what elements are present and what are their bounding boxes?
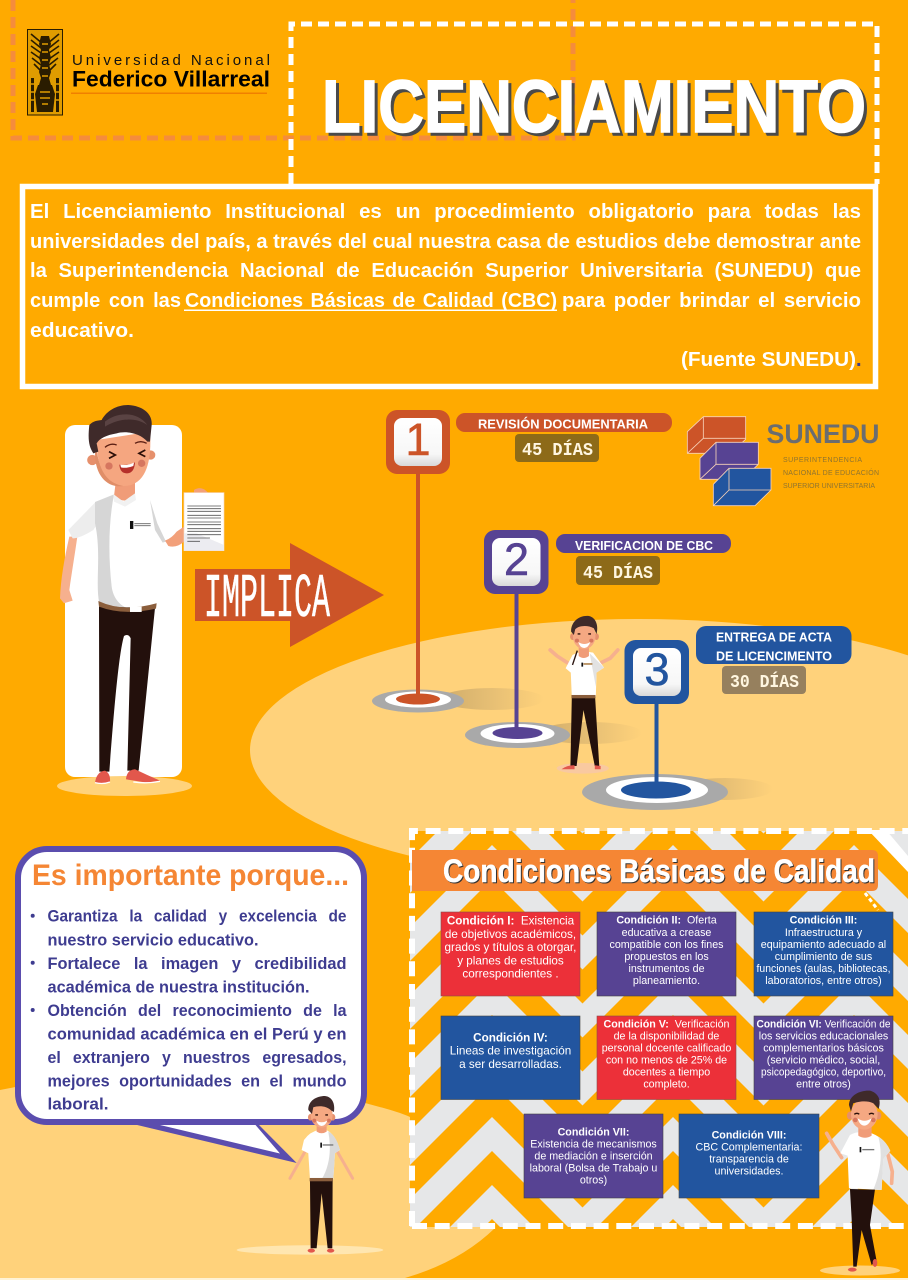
character: student beside bubble (237, 1096, 383, 1255)
condition III: laboratorios, entre otros) (765, 975, 882, 987)
bullet list: laboral. (48, 1096, 108, 1114)
condition VII (524, 1114, 663, 1198)
condition II (597, 912, 736, 996)
condition VI: (servicio médico, social, (767, 1055, 880, 1067)
step 3: duration: 30 DÍAS (730, 671, 799, 693)
condition VI: complementarios básicos (763, 1043, 884, 1055)
condition II: propuestos en los (624, 951, 709, 963)
logo: university crest (28, 30, 62, 115)
logo: SUNEDU: SUNEDU (766, 419, 880, 449)
bullet list: nuestro servicio educativo. (48, 931, 258, 949)
panel: conditions (410, 830, 908, 1227)
step 1: badge: 1 (405, 414, 431, 465)
condition V (597, 1016, 736, 1100)
step 2: label (556, 534, 731, 553)
step 1: duration: 45 DÍAS (522, 439, 593, 461)
step 1: badge (386, 410, 450, 474)
step 1: pole (416, 470, 420, 698)
step 3: pole (654, 700, 658, 788)
bullet list (31, 908, 347, 1114)
condition V: completo. (643, 1079, 690, 1091)
condition II: educativa a crease (622, 927, 711, 939)
condition VI: Condición VI: Verificación de (756, 1019, 891, 1031)
step 3: label: DE LICENCIMENTO (716, 649, 832, 664)
condition VII: Existencia de mecanismos (530, 1139, 657, 1151)
panel: definition: educativo. (30, 320, 134, 342)
step 3: base target (582, 774, 773, 810)
university name: Federico Villarreal (72, 66, 270, 92)
condition II: planeamiento. (633, 975, 700, 987)
condition V: Condición V: Verificación (604, 1019, 730, 1031)
condition I: de objetivos académicos, (445, 928, 576, 941)
condition III: funciones (aulas, bibliotecas, (756, 963, 891, 975)
step 3: duration (722, 666, 806, 694)
condition VII: de mediación e inserción (534, 1151, 653, 1163)
edge highlights (0, 1278, 908, 1280)
bullet list: Fortalece la imagen y credibilidad (48, 955, 346, 973)
panel: importance speech bubble (18, 849, 364, 1163)
bubble heading: Es importante porque... (32, 859, 349, 892)
condition VI: los servicios educacionales (759, 1031, 888, 1043)
condition IV: Condición IV: (473, 1031, 548, 1044)
logo: SUNEDU: NACIONAL DE EDUCACIÓN (783, 468, 879, 477)
bullet list: el extranjero y nuestros egresados, (48, 1049, 346, 1067)
condition VII: otros) (580, 1175, 607, 1187)
step 2: duration: 45 DÍAS (583, 562, 653, 584)
step 3: label: ENTREGA DE ACTA (716, 630, 833, 645)
bullet list: Obtención del reconocimiento de la (48, 1002, 347, 1020)
condition VII: laboral (Bolsa de Trabajo u (530, 1163, 657, 1175)
step 3: badge (624, 640, 689, 704)
floor shadow: right character (820, 1266, 900, 1276)
panel: definition: . (856, 349, 862, 371)
white dashed title frame (291, 24, 877, 184)
step 1: label (456, 413, 672, 432)
step 2: badge (484, 530, 548, 594)
condition V: personal docente calificado (602, 1043, 731, 1055)
university name: Universidad Nacional (72, 52, 270, 69)
condition V: con no menos de 25% de (606, 1055, 727, 1067)
condition VI: psicopedagógico, deportivo, (761, 1067, 886, 1079)
condition VIII: universidades. (715, 1165, 783, 1177)
panel: definition: (Fuente SUNEDU) (681, 349, 856, 371)
condition IV: Lineas de investigación (450, 1045, 571, 1058)
bullet list: mejores oportunidades en el mundo (48, 1073, 346, 1091)
condition III (754, 912, 893, 996)
condition II: compatible con los fines (609, 939, 724, 951)
condition VIII: CBC Complementaria: (696, 1141, 802, 1153)
condition V: de la disponibilidad de (614, 1031, 719, 1043)
condition III: Condición III: (790, 915, 857, 927)
condition VIII: transparencia de (709, 1153, 789, 1165)
character: waving student (827, 1091, 892, 1272)
panel: definition: para poder brindar el servicio (562, 290, 861, 312)
panel: definition: Condiciones Básicas de Calidad (CBC) (185, 290, 557, 312)
character: celebrating student (550, 616, 618, 774)
panel: definition: universidades del país, a través del cual nuestra casa de estudios debe demostrar ante (30, 231, 861, 253)
condition V: docentes a tiempo (623, 1067, 710, 1079)
step 2: pole (514, 590, 518, 732)
panel: definition: El Licenciamiento Institucional es un procedimiento obligatorio para todas las (30, 201, 861, 223)
step 1: label: REVISIÓN DOCUMENTARIA (478, 416, 649, 432)
step 2: base target (465, 722, 642, 748)
step 2: badge: 2 (504, 534, 529, 585)
bullet list: Garantiza la calidad y excelencia de (48, 908, 346, 926)
condition VI (754, 1016, 893, 1100)
condition IV (441, 1016, 580, 1100)
step 2: duration (576, 556, 660, 585)
condition II: Condición II: Oferta (616, 915, 717, 927)
bullet list: académica de nuestra institución. (48, 978, 310, 996)
condition II: instrumentos de (628, 963, 705, 975)
condition I: correspondientes . (462, 967, 559, 980)
background: light ellipse hill (250, 619, 908, 881)
floor shadow: large character (57, 776, 192, 796)
condition VII: Condición VII: (558, 1126, 629, 1138)
condition I: Condición I: Existencia (447, 915, 575, 928)
step 1: base target (372, 688, 544, 712)
background: lower left light hill (0, 1076, 495, 1278)
bubble tail (133, 1124, 297, 1163)
orange dashed frame (13, 0, 573, 138)
condition III: Infraestructura y (785, 927, 863, 939)
panel: definition: cumple con las (30, 290, 181, 312)
condition IV: a ser desarrolladas. (459, 1058, 562, 1071)
icon: stacked blocks (687, 417, 771, 506)
condition III: cumplimiento de sus (775, 951, 872, 963)
arrow: IMPLICA (195, 543, 384, 647)
logo: SUNEDU: SUPERIOR UNIVERSITARIA (783, 483, 875, 490)
character: large student with document (60, 405, 224, 783)
logo: SUNEDU: SUPERINTENDENCIA (783, 457, 862, 464)
panel: definition: la Superintendencia Nacional de Educación Superior Universitaria (SUNEDU) que (30, 260, 861, 282)
condition I (441, 912, 580, 996)
university name (71, 52, 270, 94)
panel: definition (22, 186, 876, 386)
condition III: equipamiento adecuado al (761, 939, 886, 951)
step 3: badge: 3 (644, 644, 670, 695)
step 1: duration (515, 434, 599, 462)
condition VIII: Condición VIII: (712, 1129, 786, 1141)
condition VI: entre otros) (796, 1079, 851, 1091)
step 3: label (696, 626, 852, 664)
bullet list: comunidad académica en el Perú y en (48, 1025, 346, 1043)
condition VIII (679, 1114, 819, 1198)
condition I: grados y títulos a otorgar, (445, 941, 576, 954)
logo: SUNEDU (687, 417, 880, 506)
arrow: IMPLICA: IMPLICA (204, 564, 330, 635)
condition I: y planes de estudios (457, 954, 564, 967)
white column behind large character (65, 425, 182, 777)
step 2: label: VERIFICACION DE CBC (575, 538, 714, 553)
